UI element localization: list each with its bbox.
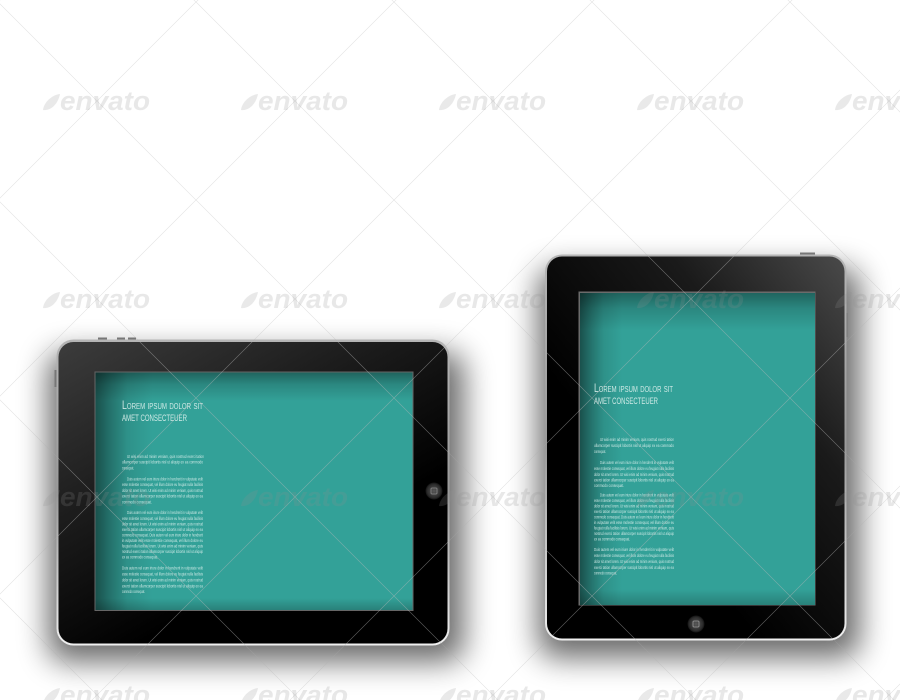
portrait body text: commodo consequat. bbox=[594, 483, 624, 488]
landscape body text: Ut wisi enim ad minim veniam, quis nostrud exerci tation bbox=[127, 454, 204, 459]
watermark row 2: envato bbox=[60, 284, 150, 314]
landscape body text: esse molestie consequat, vel illum dolore eu feugiat nulla facilisis bbox=[122, 572, 203, 576]
watermark row 1: envato bbox=[258, 86, 348, 116]
portrait home button bbox=[688, 616, 704, 632]
portrait body text: feugiat nulla facilisis lorem. Ut wisi enim ad minim veniam, quis bbox=[594, 526, 674, 530]
landscape body text: nostrud exerci tation ullamcorper suscipit lobortis nisl ut aliquip bbox=[122, 549, 203, 554]
portrait body text: dolor sit amet lorem. Ut wisi enim ad minim veniam, quis nostrud bbox=[594, 559, 674, 564]
landscape tablet bezel bbox=[58, 342, 448, 644]
landscape body text: commodo consequat. bbox=[122, 589, 145, 594]
portrait body text: Ut wisi enim ad minim veniam, quis nostrud exerci tation bbox=[600, 437, 674, 442]
landscape body text: Duis autem vel eum iriure dolor in hendrerit in vulputate velit bbox=[122, 566, 203, 570]
portrait heading: Lorem ipsum dolor sit bbox=[594, 383, 673, 395]
portrait heading: AMET CONSECTEUER bbox=[594, 396, 658, 407]
landscape body text: commodo consequat. Duis autem vel eum iriure dolor in hendrerit bbox=[122, 532, 203, 538]
watermark row 3 bbox=[43, 482, 900, 512]
watermark row 4 bbox=[43, 680, 900, 700]
watermark row 2: envato bbox=[456, 284, 546, 314]
landscape tablet screen bbox=[94, 372, 414, 611]
landscape body text: dolor sit amet lorem. Ut wisi enim ad minim veniam, quis nostrud bbox=[122, 522, 203, 526]
watermark row 3: envato bbox=[60, 482, 150, 512]
portrait tablet side buttons bbox=[800, 252, 848, 337]
portrait body text: Duis autem vel eum iriure dolor in hendrerit in vulputate velit bbox=[594, 547, 674, 552]
landscape body text: exerci tation ullamcorper suscipit lobortis nisl ut aliquip ex ea bbox=[122, 584, 203, 588]
watermark row 1: envato bbox=[60, 86, 150, 116]
landscape heading: AMET CONSECTEUER bbox=[122, 413, 187, 424]
landscape tablet shadow bbox=[48, 352, 464, 662]
watermark row 1: envato bbox=[654, 86, 744, 116]
watermark row 2: envato bbox=[258, 284, 348, 314]
landscape tablet bbox=[48, 338, 464, 662]
portrait body text bbox=[594, 437, 674, 576]
landscape heading bbox=[122, 400, 203, 424]
portrait body text: ullamcorper suscipit lobortis nisl ut aliquip ex ea commodo bbox=[594, 443, 674, 448]
landscape body text: esse molestie consequat, vel illum dolore eu feugiat nulla facilisis bbox=[122, 482, 203, 487]
portrait tablet shadow bbox=[538, 268, 860, 658]
landscape body text: in vulputate velit esse molestie consequat, vel illum dolore eu bbox=[122, 538, 203, 543]
portrait body text: exerci tation ullamcorper suscipit lobortis nisl ut aliquip ex ea bbox=[594, 565, 674, 570]
landscape body text bbox=[122, 454, 204, 594]
watermark lattice over tablets bbox=[58, 256, 845, 644]
portrait body text: dolor sit amet lorem. Ut wisi enim ad minim veniam, quis nostrud bbox=[594, 472, 674, 477]
portrait body text: esse molestie consequat, vel illum dolore eu feugiat nulla facilisis bbox=[594, 553, 674, 558]
watermark row 3: envato bbox=[654, 482, 744, 512]
portrait body text: commodo consequat. bbox=[594, 570, 617, 576]
portrait tablet screen bbox=[578, 292, 816, 606]
watermark row 3: envato bbox=[258, 482, 348, 512]
portrait tablet rim bbox=[545, 254, 846, 640]
landscape body text: dolor sit amet lorem. Ut wisi enim ad minim veniam, quis nostrud bbox=[122, 578, 203, 582]
portrait body text: exerci tation ullamcorper suscipit lobortis nisl ut aliquip ex ea bbox=[594, 509, 674, 514]
portrait body text: Duis autem vel eum iriure dolor in hendrerit in vulputate velit bbox=[600, 460, 674, 465]
portrait body text: esse molestie consequat, vel illum dolore eu feugiat nulla facilisis bbox=[594, 498, 674, 503]
landscape tablet rim bbox=[56, 340, 450, 646]
portrait tablet bezel bbox=[547, 256, 844, 638]
portrait body text: Duis autem vel eum iriure dolor in hendrerit in vulputate velit bbox=[600, 492, 674, 498]
landscape home button bbox=[426, 482, 442, 500]
portrait body text: commodo consequat. Duis autem vel eum iriure dolor in hendrerit bbox=[594, 514, 674, 520]
landscape body text: exerci tation ullamcorper suscipit lobortis nisl ut aliquip ex ea bbox=[122, 494, 203, 498]
landscape body text: ex ea commodo consequat. bbox=[122, 554, 158, 560]
watermark row 2 bbox=[43, 284, 900, 314]
portrait body text: dolor sit amet lorem. Ut wisi enim ad minim veniam, quis nostrud bbox=[594, 504, 674, 508]
landscape body text: exerci tation ullamcorper suscipit lobortis nisl ut aliquip ex ea bbox=[122, 527, 203, 532]
portrait body text: in vulputate velit esse molestie consequat, vel illum dolore eu bbox=[594, 520, 674, 525]
portrait body text: consequat. bbox=[594, 449, 606, 454]
landscape body text: feugiat nulla facilisis lorem. Ut wisi enim ad minim veniam, quis bbox=[122, 544, 203, 548]
landscape body text: ullamcorper suscipit lobortis nisl ut aliquip ex ea commodo bbox=[122, 460, 203, 464]
landscape body text: commodo consequat. bbox=[122, 500, 152, 504]
landscape body text: Duis autem vel eum iriure dolor in hendrerit in vulputate velit bbox=[127, 476, 203, 482]
watermark row 1 bbox=[43, 86, 900, 116]
portrait body text: esse molestie consequat, vel illum dolore eu feugiat nulla facilisis bbox=[594, 466, 674, 471]
portrait tablet bbox=[538, 252, 860, 658]
portrait body text: exerci tation ullamcorper suscipit lobortis nisl ut aliquip ex ea bbox=[594, 478, 674, 482]
landscape heading: Lorem ipsum dolor sit bbox=[122, 400, 203, 412]
portrait body text: nostrud exerci tation ullamcorper suscipit lobortis nisl ut aliquip bbox=[594, 531, 674, 536]
watermark row 3: envato bbox=[456, 482, 546, 512]
watermark row 2: envato bbox=[654, 284, 744, 314]
landscape body text: dolor sit amet lorem. Ut wisi enim ad minim veniam, quis nostrud bbox=[122, 488, 203, 493]
landscape body text: esse molestie consequat, vel illum dolore eu feugiat nulla facilisis bbox=[122, 516, 203, 521]
portrait heading bbox=[594, 383, 673, 407]
portrait body text: ex ea commodo consequat. bbox=[594, 536, 630, 542]
landscape body text: Duis autem vel eum iriure dolor in hendrerit in vulputate velit bbox=[127, 510, 203, 515]
landscape tablet side buttons bbox=[54, 338, 136, 387]
watermark row 1: envato bbox=[456, 86, 546, 116]
landscape body text: consequat. bbox=[122, 466, 134, 470]
